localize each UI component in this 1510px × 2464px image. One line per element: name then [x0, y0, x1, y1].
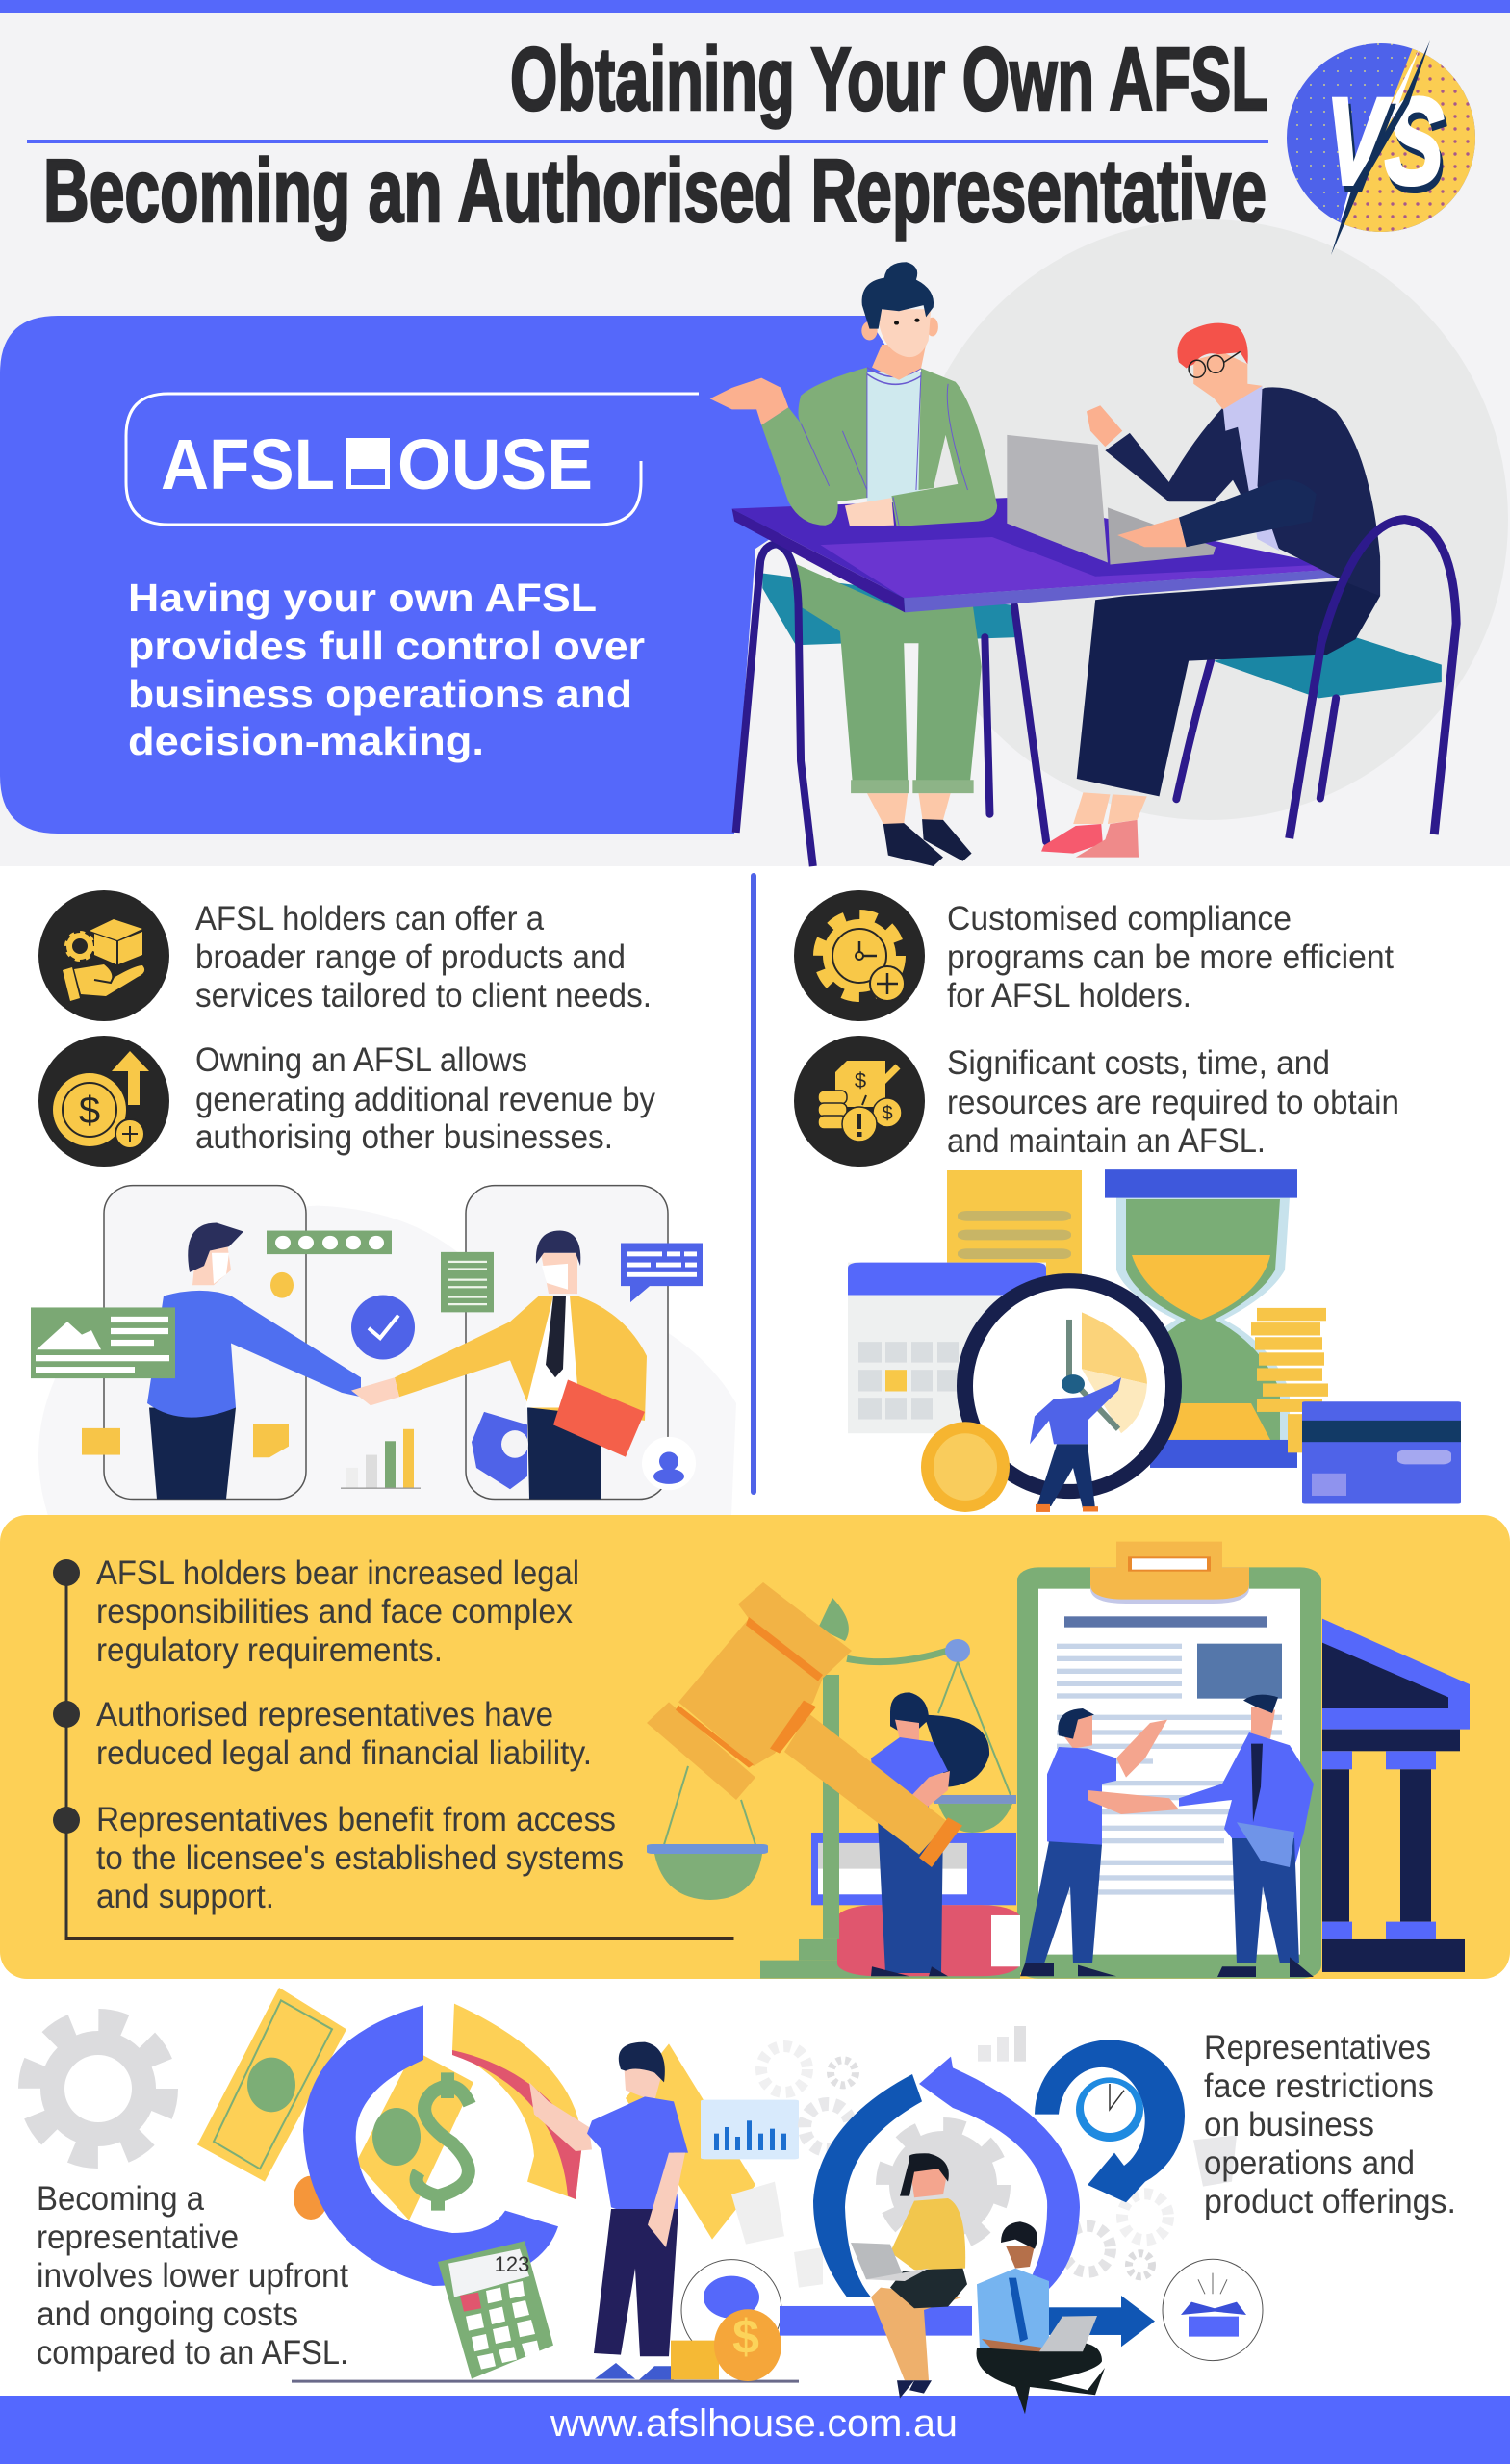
man in blue shirt: [147, 1223, 361, 1500]
illustration: lower costs: [30, 1988, 1456, 2414]
blue ball: [704, 2276, 759, 2319]
intro text: [128, 576, 645, 763]
rating card: [267, 1231, 392, 1254]
profile icon: [642, 1437, 696, 1490]
logo: AFSL House: [161, 424, 593, 504]
coin: [294, 2176, 328, 2220]
outlined circles: [681, 2259, 1263, 2361]
icon: dollar coin and arrow: $: [79, 1090, 100, 1132]
text: lower costs: Becoming a: [37, 2180, 205, 2218]
chair seats: [762, 574, 1442, 698]
icon: coins and warning: $: [855, 1068, 866, 1092]
clock icon: [1076, 2077, 1143, 2142]
icon: open box: [1181, 2273, 1246, 2337]
top bar: [0, 0, 1510, 13]
illustration: two people at a desk: [710, 262, 1456, 866]
icon: dollar coin and arrow: [38, 1036, 169, 1167]
text: restrictions: product offerings.: [1204, 2183, 1456, 2220]
text: restrictions: [1204, 2029, 1456, 2220]
text: lower costs: compared to an AFSL.: [37, 2334, 348, 2372]
text: reduced liability: [96, 1696, 592, 1772]
column divider: [751, 873, 756, 1495]
circular arrows: [303, 2004, 582, 2286]
coin stack: [1251, 1308, 1328, 1452]
icon: VS badge: VS: [1326, 73, 1444, 211]
background circle behind people: [908, 219, 1508, 820]
text: lower costs: representative: [37, 2219, 239, 2256]
text: licensee systems: and support.: [96, 1878, 274, 1915]
text: compliance programs: for AFSL holders.: [947, 977, 1191, 1014]
illustration: handshake: [31, 1186, 736, 1516]
text: product range: [195, 900, 652, 1014]
website address: www.afslhouse.com.au: [550, 2402, 958, 2445]
green man torso: [710, 262, 997, 526]
text: product range: services tailored to client needs.: [195, 977, 652, 1014]
hourglass: [1105, 1169, 1297, 1468]
icon: gear with clock: [794, 890, 925, 1021]
speech bubble: [621, 1243, 703, 1302]
text: restrictions: face restrictions: [1204, 2067, 1434, 2105]
text: legal responsibilities: regulatory requirements.: [96, 1631, 443, 1669]
man in yellow jacket: [351, 1231, 647, 1500]
title: [27, 29, 1268, 241]
text: additional revenue: authorising other businesses.: [195, 1118, 613, 1156]
scales: [647, 1598, 1016, 1939]
two men shaking hands: [1020, 1695, 1314, 1977]
bar chart: [341, 1429, 421, 1489]
left chair back: [736, 544, 813, 866]
bank building: [1322, 1619, 1470, 1972]
icon: coins and warning: $: [882, 1103, 893, 1124]
navy man torso: [1087, 323, 1380, 596]
logo: AFSL House: OUSE: [397, 424, 593, 504]
calculator: [438, 2241, 553, 2379]
text: lower costs: involves lower upfront: [37, 2257, 348, 2295]
books and steps: [760, 1833, 1020, 1979]
chart card: [701, 2100, 799, 2159]
text: costs and resources: and maintain an AFSL.: [947, 1122, 1266, 1160]
image card: [31, 1307, 175, 1378]
panel: legal responsibilities: [0, 1515, 1510, 1979]
man pointing: [529, 2042, 688, 2380]
desk: [732, 498, 1346, 612]
ground line: [292, 2380, 799, 2383]
banknotes: [197, 1988, 755, 2240]
text: compliance programs: programs can be more efficient: [947, 938, 1394, 976]
icon: VS badge: VS: [1329, 80, 1446, 218]
text: lower costs: [37, 2180, 348, 2372]
gavel: [647, 1582, 962, 1867]
gold coin: [921, 1422, 1010, 1512]
clock: [957, 1273, 1182, 1499]
text: licensee systems: Representatives benefit from access: [96, 1801, 616, 1838]
text: compliance programs: Customised compliance: [947, 900, 1292, 937]
text: licensee systems: to the licensee's established systems: [96, 1839, 624, 1877]
green man legs: [788, 560, 982, 866]
person at clock: [1030, 1374, 1121, 1512]
laptop: [1007, 435, 1216, 565]
icon: coins and warning: [794, 1036, 925, 1167]
panel: intro: [0, 316, 899, 834]
text: reduced liability: reduced legal and financial liability.: [96, 1734, 592, 1772]
faint gears and paper: [731, 2026, 1237, 2288]
text: restrictions: Representatives: [1204, 2029, 1431, 2066]
illustration: time and money: [848, 1169, 1461, 1512]
text: costs and resources: [947, 1044, 1399, 1160]
text: additional revenue: Owning an AFSL allows: [195, 1041, 527, 1079]
credit card: [1302, 1401, 1461, 1503]
text: lower costs: and ongoing costs: [37, 2296, 298, 2333]
text: legal responsibilities: responsibilities and face complex: [96, 1593, 573, 1630]
receipt: [947, 1170, 1082, 1279]
icon: box in hand and gear: [38, 890, 169, 1021]
logo: AFSL House: AFSL: [161, 424, 335, 504]
intro text: Having your own AFSL: [128, 576, 597, 620]
text: additional revenue: [195, 1041, 655, 1156]
clipboard: [1017, 1542, 1321, 1979]
arrow: [780, 2296, 1155, 2347]
text: restrictions: operations and: [1204, 2144, 1415, 2182]
gear: [472, 1412, 528, 1489]
text: reduced liability: Authorised representatives have: [96, 1696, 553, 1733]
illustration: legal scene: [647, 1542, 1470, 1979]
small icons: [82, 1272, 294, 1457]
text: additional revenue: generating additional revenue by: [195, 1081, 655, 1118]
icon: VS badge: [1287, 40, 1477, 255]
calendar: [848, 1263, 1046, 1433]
navy man legs: [1041, 560, 1380, 858]
timeline: [53, 1559, 733, 1940]
header background: [0, 0, 1510, 866]
coins: $: [732, 2310, 759, 2364]
text: costs and resources: Significant costs, time, and: [947, 1044, 1330, 1082]
check badge: [351, 1296, 415, 1359]
grey gear centre: [883, 2125, 1003, 2245]
logo frame: [126, 394, 699, 525]
chair legs behind: [985, 605, 1336, 841]
man with laptop: [976, 2221, 1105, 2414]
text: licensee systems: [96, 1801, 624, 1915]
dollar sign: [416, 2072, 470, 2211]
right chair back: [1290, 520, 1456, 838]
intro text: decision-making.: [128, 719, 484, 763]
intro text: business operations and: [128, 672, 632, 716]
cycle arrows: [813, 2040, 1185, 2297]
coins: [671, 2309, 781, 2381]
woman with gavel: [871, 1692, 989, 1976]
intro text: provides full control over: [128, 624, 645, 668]
text: product range: broader range of products and: [195, 938, 626, 976]
woman with laptop: [851, 2153, 967, 2399]
phone frames: [104, 1186, 668, 1500]
text: legal responsibilities: [96, 1554, 579, 1669]
text: product range: AFSL holders can offer a: [195, 900, 544, 937]
text: legal responsibilities: AFSL holders bear increased legal: [96, 1554, 579, 1592]
panel: AFSL points: [38, 890, 1399, 1167]
text: costs and resources: resources are required to obtain: [947, 1084, 1399, 1121]
calculator: 123: [495, 2252, 529, 2276]
text: compliance programs: [947, 900, 1394, 1014]
text: restrictions: on business: [1204, 2106, 1374, 2143]
icon: grey gear: [30, 2020, 166, 2157]
footer: [0, 2396, 1510, 2464]
checklist: [441, 1252, 494, 1312]
